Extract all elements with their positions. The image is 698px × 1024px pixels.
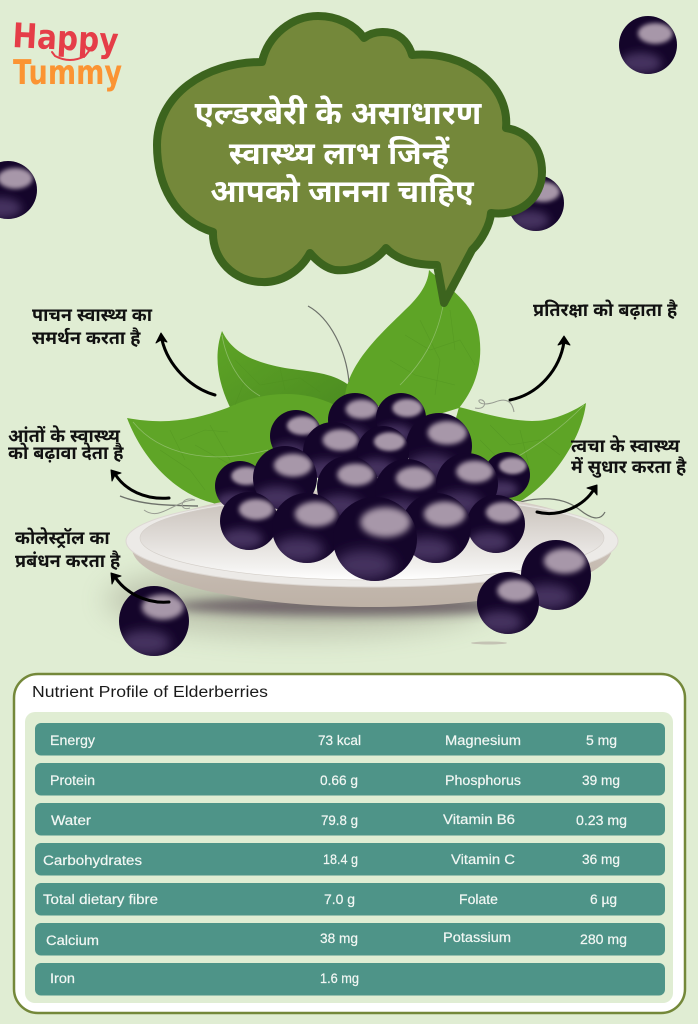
row: carbohydrates / vitamin C: 36 mg <box>582 852 620 867</box>
label: gut health: को बढ़ावा देता है <box>8 442 124 463</box>
row: water / vitamin B6: 79.8 g <box>321 813 358 828</box>
label: skin health <box>571 436 687 478</box>
decorative berry: left edge <box>0 161 37 219</box>
leaf: right <box>450 403 586 502</box>
label: gut health <box>8 425 124 463</box>
plate shadow <box>105 564 525 644</box>
arrow: skin <box>537 485 597 513</box>
illustration: plate <box>126 489 618 607</box>
table background <box>25 712 673 1003</box>
logo: Happy Tummy: Tummy <box>13 53 122 93</box>
decorative berry: behind bubble <box>508 175 564 231</box>
plate rim <box>126 495 618 587</box>
title text: आपको जानना चाहिए <box>210 174 475 209</box>
row: protein / phosphorus <box>35 763 665 796</box>
label: immunity: प्रतिरक्षा को बढ़ाता है <box>533 299 678 320</box>
panel frame <box>14 674 685 1013</box>
row: water / vitamin B6: 0.23 mg <box>576 813 627 828</box>
row: calcium / potassium: 38 mg <box>320 931 358 946</box>
arrow: gut <box>111 470 169 498</box>
row: iron: Iron <box>50 971 75 986</box>
title text: स्वास्थ्य लाभ जिन्हें <box>229 136 451 171</box>
label: skin health: में सुधार करता है <box>571 456 687 478</box>
row: carbohydrates / vitamin C <box>35 843 665 876</box>
row: carbohydrates / vitamin C: 18.4 g <box>323 852 358 867</box>
row: carbohydrates / vitamin C: Carbohydrates <box>43 853 142 868</box>
row: fibre / folate <box>35 883 665 916</box>
row: energy / magnesium: 73 kcal <box>318 733 361 748</box>
row: energy / magnesium: Magnesium <box>445 733 521 748</box>
row: water / vitamin B6: Vitamin B6 <box>443 812 515 827</box>
plate well <box>140 496 604 580</box>
label: cholesterol: प्रबंधन करता है <box>15 550 121 571</box>
row: water / vitamin B6 <box>35 803 665 836</box>
row: calcium / potassium: 280 mg <box>580 932 627 947</box>
logo: Happy Tummy <box>12 16 122 93</box>
leaf: upper left <box>217 331 352 425</box>
speech bubble title <box>157 16 542 303</box>
row: calcium / potassium <box>35 923 665 956</box>
thin curling stems <box>120 306 605 518</box>
row: iron: 1.6 mg <box>320 971 359 986</box>
label: cholesterol <box>15 528 121 571</box>
row: fibre / folate: Folate <box>459 892 498 907</box>
logo: Happy Tummy: Happy <box>12 16 119 62</box>
row: protein / phosphorus: 0.66 g <box>320 773 358 788</box>
berry cluster <box>215 393 530 581</box>
row: water / vitamin B6: Water <box>51 813 92 828</box>
loose berries near plate <box>119 540 591 656</box>
leaf midribs <box>133 300 584 458</box>
leaf: centre top <box>345 270 480 420</box>
plate underside <box>132 489 612 607</box>
row: protein / phosphorus: Protein <box>50 773 95 788</box>
leaf: left lower <box>127 394 335 510</box>
row: fibre / folate: 6 µg <box>590 892 617 907</box>
label: digestive health: पाचन स्वास्थ्य का <box>32 305 153 325</box>
title text: एल्डरबेरी के असाधारण <box>195 95 483 131</box>
row: calcium / potassium: Potassium <box>443 930 511 945</box>
benefit arrows <box>111 333 597 602</box>
panel: nutrient profile <box>14 674 685 1013</box>
panel heading: Nutrient Profile of Elderberries <box>32 684 268 701</box>
arrow: cholesterol <box>111 573 169 602</box>
row: fibre / folate: 7.0 g <box>324 892 355 907</box>
row: carbohydrates / vitamin C: Vitamin C <box>451 852 515 867</box>
row: protein / phosphorus: Phosphorus <box>445 773 521 788</box>
decorative berry: top right <box>619 16 677 74</box>
row: iron <box>35 963 665 996</box>
illustration: leaves <box>127 270 586 510</box>
arrow: digestion <box>156 333 215 395</box>
title text <box>195 95 483 209</box>
arrow: immunity <box>510 336 570 400</box>
label: gut health: आंतों के स्वास्थ्य <box>8 425 120 446</box>
row: calcium / potassium: Calcium <box>46 933 99 948</box>
row: fibre / folate: Total dietary fibre <box>43 892 158 907</box>
benefit labels <box>8 299 687 571</box>
bubble shape <box>157 16 542 303</box>
label: skin health: त्वचा के स्वास्थ्य <box>571 436 680 456</box>
leaf veins <box>160 310 560 490</box>
label: cholesterol: कोलेस्ट्रॉल का <box>15 528 110 549</box>
label: digestive health: समर्थन करता है <box>32 327 141 348</box>
row: energy / magnesium: Energy <box>50 733 95 748</box>
label: digestive health <box>32 305 153 348</box>
row: protein / phosphorus: 39 mg <box>582 773 620 788</box>
row: energy / magnesium: 5 mg <box>586 733 617 748</box>
row: energy / magnesium <box>35 723 665 756</box>
